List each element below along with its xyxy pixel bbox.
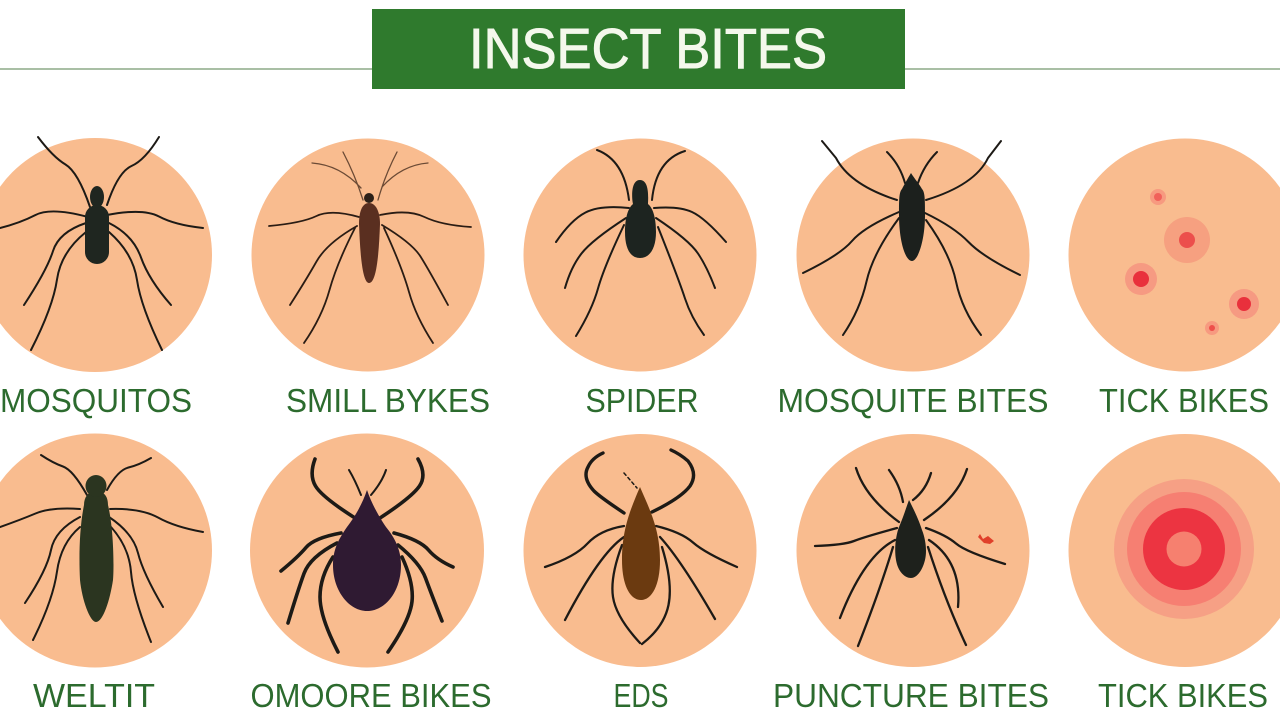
title: INSECT BITES	[469, 17, 827, 81]
label: PUNCTURE BITES	[773, 677, 1049, 714]
label: OMOORE BIKES	[250, 677, 492, 714]
icon: bullseye rash	[1114, 479, 1254, 619]
icon: blood marks	[978, 534, 994, 544]
label: SMILL BYKES	[286, 382, 490, 419]
icon: mosquito	[803, 141, 1020, 335]
panel: eds	[524, 434, 756, 714]
panel: tick bikes rash	[1068, 434, 1280, 714]
label: TICK BIKES	[1098, 677, 1268, 714]
icon: thin insect	[269, 152, 471, 343]
panel: mosquite bites	[778, 138, 1048, 419]
icon: brown insect	[545, 450, 737, 644]
icon: black insect	[815, 468, 1005, 646]
label: MOSQUITOS	[0, 382, 192, 419]
panel: weltit	[0, 434, 212, 714]
label: SPIDER	[586, 382, 698, 419]
icon: long insect	[0, 455, 203, 642]
icon: spider	[556, 150, 726, 336]
icon: red bite spots	[1125, 189, 1259, 335]
panel: mosquitos	[0, 137, 212, 419]
label: WELTIT	[33, 677, 155, 714]
icon: tick	[281, 459, 453, 652]
panel: puncture bites	[773, 434, 1049, 714]
title	[372, 9, 905, 89]
panel: small bites	[252, 138, 490, 419]
label: EDS	[614, 677, 668, 714]
panel: tick bikes marks	[1068, 138, 1280, 419]
label: MOSQUITE BITES	[778, 382, 1048, 419]
label: TICK BIKES	[1099, 382, 1269, 419]
icon: mosquito	[0, 137, 203, 350]
panel: omoore bikes	[250, 434, 492, 714]
panel: spider	[524, 138, 756, 419]
